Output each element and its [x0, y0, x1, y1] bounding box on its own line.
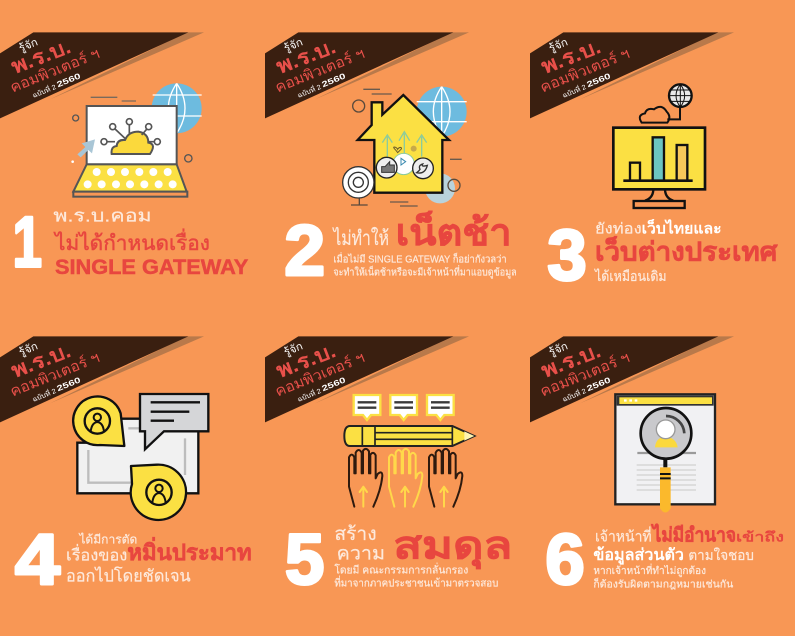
text: point 6: เจ้าหน้าที่ — [595, 527, 652, 546]
banner — [530, 32, 734, 118]
banner: คอมพิวเตอร์ ฯ — [8, 45, 102, 96]
text: point 4 — [66, 532, 252, 586]
panel 1: Single Gateway — [0, 32, 248, 283]
banner: คอมพิวเตอร์ ฯ — [538, 45, 632, 96]
text: point 6: หากเจ้าหน้าที่ทำไม่ถูกต้อง — [593, 563, 706, 577]
text: point 5: สมดุล — [393, 524, 512, 569]
panel 5: create balance — [265, 336, 512, 600]
panel 3: browse sites as usual — [530, 32, 778, 295]
icon: laptop with cloud — [71, 83, 202, 197]
banner: 2560 — [320, 375, 348, 393]
banner: รู้จัก — [547, 36, 570, 55]
banner: พ.ร.บ. — [8, 35, 74, 79]
text: point 5 — [334, 523, 512, 590]
banner: 2560 — [55, 71, 83, 89]
text: point 2: จะทำให้เน็ตช้าหรือจะมีเจ้าหน้าที่มาแอบดูข้อมูล — [333, 265, 517, 279]
banner: 2560 — [55, 375, 83, 393]
text: point 2: เน็ตช้า — [396, 210, 512, 253]
text: point 3: เว็บต่างประเทศ — [595, 236, 778, 267]
text: point 6: เข้าถึง — [736, 530, 784, 545]
banner: คอมพิวเตอร์ ฯ — [538, 349, 632, 400]
text: point 3: เว็บไทยและ — [642, 217, 722, 237]
banner: 2560 — [585, 375, 613, 393]
banner: ฉบับที่ 2 — [561, 386, 588, 404]
text: point 5: ที่มาจากภาคประชาชนเข้ามาตรวจสอบ — [334, 576, 498, 590]
text: point 2 — [332, 210, 517, 279]
number 3: 3 — [547, 215, 587, 295]
text: point 5: โดยมี คณะกรรมการกลั่นกรอง — [334, 562, 468, 576]
text: point 6: ตามใจชอบ — [688, 547, 754, 563]
banner: คอมพิวเตอร์ ฯ — [273, 349, 367, 400]
icon: pencil, notes and raised hands — [344, 395, 474, 507]
text: point 6: ข้อมูลส่วนตัว — [593, 546, 684, 566]
banner: ฉบับที่ 2 — [561, 82, 588, 100]
banner: คอมพิวเตอร์ ฯ — [8, 349, 102, 400]
panel 6: officials have no access — [530, 336, 784, 600]
text: point 3 — [594, 217, 778, 284]
text: point 1: ไม่ได้กำหนดเรื่อง — [53, 229, 210, 255]
number 4: 4 — [15, 520, 60, 600]
text: point 6: ไม่มีอำนาจ — [651, 524, 736, 547]
number 5: 5 — [285, 520, 324, 600]
banner — [0, 32, 204, 118]
icon: chat bubbles — [73, 394, 208, 520]
banner: รู้จัก — [547, 340, 570, 359]
banner: พ.ร.บ. — [538, 339, 604, 383]
banner: รู้จัก — [282, 340, 305, 359]
banner — [530, 336, 734, 422]
banner: ฉบับที่ 2 — [296, 82, 323, 100]
text: point 1 — [53, 206, 248, 279]
banner — [0, 336, 204, 422]
banner: รู้จัก — [17, 36, 40, 55]
banner: ฉบับที่ 2 — [31, 386, 58, 404]
text: point 2: ไม่ทำให้ — [332, 227, 389, 250]
text: point 3: ยังท่อง — [595, 221, 642, 237]
text: point 1: SINGLE GATEWAY — [55, 255, 248, 279]
text: point 4: หมิ่นประมาท — [127, 536, 252, 565]
text: point 5: สร้าง — [334, 523, 377, 544]
text: point 6: ก็ต้องรับผิดตามกฎหมายเช่นกัน — [593, 577, 733, 591]
banner: รู้จัก — [17, 340, 40, 359]
text: point 1: พ.ร.บ.คอม — [53, 206, 152, 226]
banner: พ.ร.บ. — [538, 35, 604, 79]
text: point 4: ออกไปโดยชัดเจน — [66, 567, 191, 586]
banner: ฉบับที่ 2 — [296, 386, 323, 404]
banner: พ.ร.บ. — [273, 339, 339, 383]
icon: document under magnifier — [615, 394, 715, 512]
banner: 2560 — [585, 71, 613, 89]
icon: house with uploads — [343, 87, 467, 206]
banner: รู้จัก — [282, 36, 305, 55]
icon: monitor with bar chart — [613, 84, 705, 208]
banner: ฉบับที่ 2 — [31, 82, 58, 100]
panel 4: defamation removed — [0, 336, 252, 600]
banner: พ.ร.บ. — [273, 35, 339, 79]
banner — [265, 336, 469, 422]
number 6: 6 — [545, 520, 585, 600]
panel 2: internet not slowed — [265, 32, 517, 291]
text: point 5: ความ — [337, 542, 385, 563]
text: point 4: เรื่องของ — [66, 544, 127, 565]
text: point 3: ได้เหมือนเดิม — [594, 268, 667, 284]
text: point 4: ได้มีการตัด — [78, 532, 137, 546]
text: point 2: เมื่อไม่มี SINGLE GATEWAY ก็อย่ากังวลว่า — [333, 251, 507, 265]
banner: คอมพิวเตอร์ ฯ — [273, 45, 367, 96]
text: point 6 — [593, 524, 784, 591]
number 2: 2 — [284, 211, 325, 291]
banner: 2560 — [320, 71, 348, 89]
number 1: 1 — [13, 203, 42, 283]
banner: พ.ร.บ. — [8, 339, 74, 383]
banner — [265, 32, 469, 118]
